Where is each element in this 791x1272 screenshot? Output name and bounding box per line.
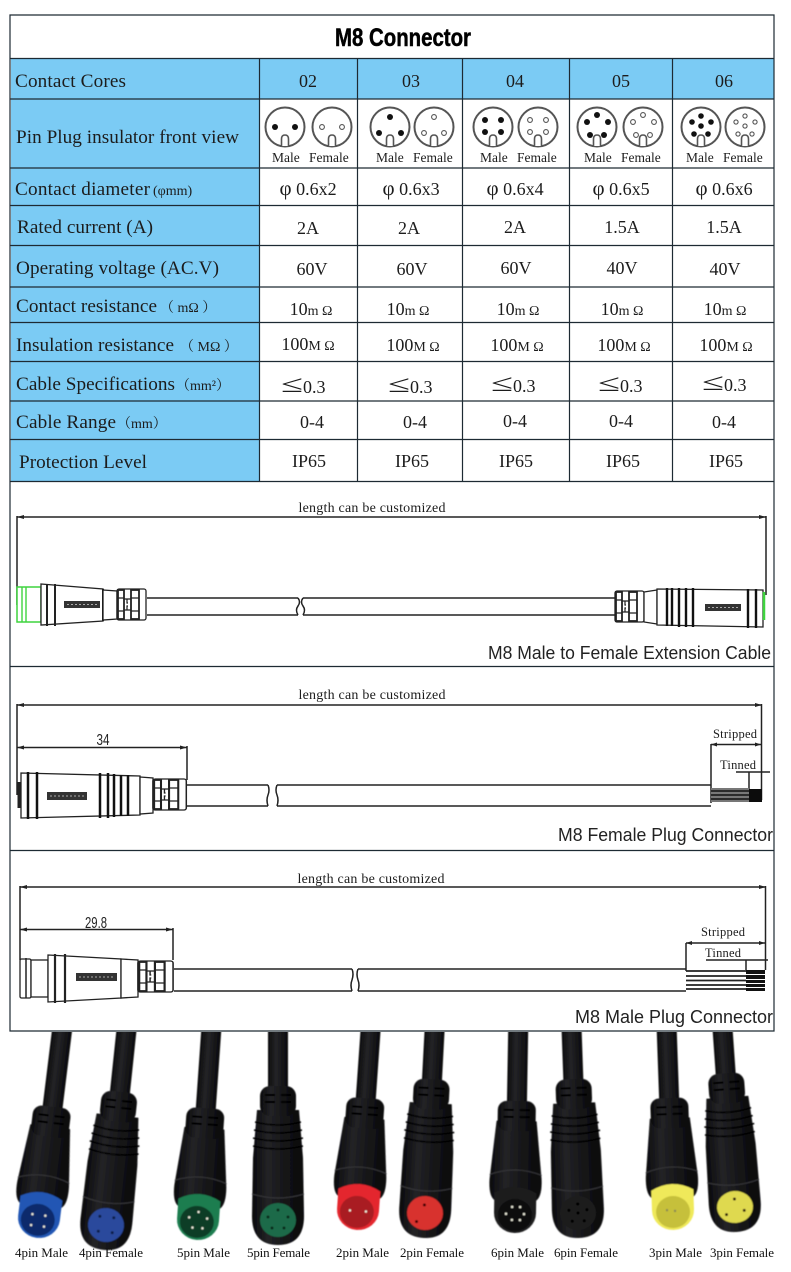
connector labels: 4pin Male <box>15 1245 68 1260</box>
row: contact diameter: φ 0.6x2 <box>279 176 337 200</box>
row: cable specifications: 0.3 <box>410 377 432 397</box>
connector: 5pin male <box>173 1032 228 1241</box>
dimension: overall length: length can be customized <box>298 501 446 516</box>
dimension: overall length <box>17 501 766 605</box>
row: protection level: IP65 <box>709 451 743 471</box>
female connector drawing <box>18 772 186 819</box>
icon: 2 pin male and female: Female <box>309 150 349 165</box>
row: contact resistance: （ mΩ ） <box>160 300 216 316</box>
row: contact resistance: 10m Ω <box>387 299 429 319</box>
row: rated current: 1.5A <box>706 217 742 237</box>
dimension: 34 <box>17 732 187 780</box>
row: rated current: 2A <box>297 218 319 238</box>
row: rated current: 1.5A <box>604 217 640 237</box>
row: insulation resistance: 100M Ω <box>281 334 335 354</box>
stripped and tinned wire end: Tinned <box>720 758 757 772</box>
row: contact cores <box>15 71 733 92</box>
row: cable range: 0-4 <box>300 412 324 432</box>
cable with break <box>187 785 711 806</box>
row: contact cores: 04 <box>506 71 524 91</box>
dimension: overall length <box>20 872 766 970</box>
row: cable specifications: 0.3 <box>513 376 536 396</box>
stripped and tinned wire end <box>686 925 768 991</box>
caption: M8 Male to Female Extension Cable <box>488 642 771 663</box>
dimension: overall length <box>17 688 762 800</box>
row: operating voltage: 60V <box>296 259 328 279</box>
stripped and tinned wire end: Stripped <box>701 925 746 939</box>
dimension: 34: 34 <box>96 732 110 749</box>
row: operating voltage <box>16 258 740 279</box>
caption: M8 Male Plug Connector <box>575 1006 773 1027</box>
row: protection level: IP65 <box>395 451 429 471</box>
panel: female plug connector <box>17 688 773 845</box>
icon: 4 pin male and female: Male <box>480 150 508 165</box>
connector labels: 6pin Male <box>491 1245 544 1260</box>
row: rated current: Rated current (A) <box>17 217 153 238</box>
header row shading <box>11 59 774 99</box>
connector labels: 2pin Male <box>336 1245 389 1260</box>
row: cable specifications: ≤ <box>702 370 724 396</box>
connector: 2pin male <box>333 1032 388 1231</box>
row: rated current: 2A <box>504 217 526 237</box>
dimension: 29.8 <box>20 915 173 960</box>
row: contact diameter: φ 0.6x6 <box>695 176 753 200</box>
row: cable specifications: Cable Specifications <box>16 374 175 395</box>
row: protection level: Protection Level <box>19 452 147 473</box>
row: contact diameter: φ 0.6x4 <box>486 176 544 200</box>
icon: 2 pin male and female <box>266 108 352 165</box>
row: insulation resistance: （ MΩ ） <box>180 339 238 355</box>
row: operating voltage: 40V <box>606 258 638 278</box>
row: contact resistance: 10m Ω <box>704 299 746 319</box>
stripped and tinned wire end <box>711 727 770 803</box>
row: contact resistance: 10m Ω <box>601 299 643 319</box>
row: cable specifications: ≤ <box>388 372 410 398</box>
male connector drawing <box>20 954 173 1003</box>
row: pin plug insulator front view: Pin Plug insulator front view <box>16 127 239 148</box>
row: insulation resistance <box>16 334 753 356</box>
icon: 2 pin male and female: Male <box>272 150 300 165</box>
dimension: 29.8: 29.8 <box>85 915 107 932</box>
row: protection level: IP65 <box>606 451 640 471</box>
row: protection level: IP65 <box>292 451 326 471</box>
row: operating voltage: 40V <box>710 259 740 279</box>
row: insulation resistance: 100M Ω <box>699 335 753 355</box>
cable with break <box>174 969 686 991</box>
row: pin plug insulator front view <box>16 108 764 165</box>
dimension: overall length: length can be customized <box>298 688 446 703</box>
label column shading <box>11 99 259 481</box>
panel: male to female extension cable <box>17 501 771 663</box>
row: contact cores: Contact Cores <box>15 71 126 92</box>
connector labels <box>15 1248 774 1260</box>
row: contact resistance: Contact resistance <box>16 296 157 317</box>
row: cable range: Cable Range <box>16 412 116 433</box>
icon: 4 pin male and female <box>474 108 558 165</box>
row: insulation resistance: 100M Ω <box>490 335 544 355</box>
row: contact diameter: φ 0.6x5 <box>592 176 650 200</box>
stripped and tinned wire end: Stripped <box>713 727 758 741</box>
row: cable specifications <box>16 370 746 398</box>
row: cable specifications: 0.3 <box>620 376 642 396</box>
female connector drawing <box>615 588 764 628</box>
row: contact cores: 06 <box>715 71 733 91</box>
connector labels: 6pin Female <box>554 1245 618 1260</box>
title: M8 Connector <box>335 24 471 52</box>
row: rated current <box>17 217 742 238</box>
connector: 4pin male <box>15 1032 73 1239</box>
row: rated current: 2A <box>398 218 420 238</box>
row: cable specifications: ≤ <box>281 372 303 398</box>
row: protection level: IP65 <box>499 451 533 471</box>
connector labels: 5pin Male <box>177 1245 230 1260</box>
icon: 5 pin male and female: Female <box>621 150 661 165</box>
connector: 3pin female <box>704 1032 762 1233</box>
connector: 3pin male <box>644 1032 699 1231</box>
row: contact cores: 05 <box>612 71 630 91</box>
row: contact cores: 03 <box>402 71 420 91</box>
row: contact cores: 02 <box>299 71 317 91</box>
connector labels: 4pin Female <box>79 1245 143 1260</box>
icon: 3 pin male and female <box>370 108 454 165</box>
connector: 6pin male <box>488 1032 542 1234</box>
row: cable specifications: 0.3 <box>724 375 746 395</box>
row: cable specifications: 0.3 <box>303 377 326 397</box>
connector: 4pin female <box>79 1032 140 1251</box>
specification table <box>10 15 774 1031</box>
row: cable range: 0-4 <box>609 411 633 431</box>
connector: 2pin female <box>398 1032 456 1239</box>
row: cable range: 0-4 <box>503 411 527 431</box>
row: contact resistance: 10m Ω <box>290 299 332 319</box>
row: contact diameter: φ 0.6x3 <box>382 176 440 200</box>
icon: 4 pin male and female: Female <box>517 150 557 165</box>
row: insulation resistance: Insulation resistance <box>16 335 174 356</box>
connector labels: 3pin Male <box>649 1245 702 1260</box>
row: cable range: 0-4 <box>403 412 427 432</box>
icon: 3 pin male and female: Male <box>376 150 404 165</box>
row: cable range <box>16 411 736 433</box>
row: contact diameter <box>15 176 753 200</box>
row: cable range: 0-4 <box>712 412 736 432</box>
icon: 6 pin male and female: Male <box>686 150 714 165</box>
row: insulation resistance: 100M Ω <box>597 335 651 355</box>
connector: 5pin female <box>251 1032 305 1246</box>
icon: 6 pin male and female <box>682 108 764 165</box>
dimension: overall length: length can be customized <box>298 872 444 887</box>
connector labels: 5pin Female <box>247 1245 310 1260</box>
panel: male plug connector <box>20 872 773 1027</box>
connector labels: 2pin Female <box>400 1245 464 1260</box>
icon: 3 pin male and female: Female <box>413 150 453 165</box>
icon: 5 pin male and female <box>578 108 662 165</box>
row: contact resistance <box>16 296 746 319</box>
row: contact diameter: (φmm) <box>153 184 193 199</box>
row: cable specifications: ≤ <box>491 371 513 397</box>
cable with break <box>147 598 615 615</box>
icon: 5 pin male and female: Male <box>584 150 612 165</box>
row: operating voltage: Operating voltage (AC.V) <box>16 258 219 279</box>
row: cable range: （mm） <box>117 416 167 432</box>
connector: 6pin female <box>549 1032 605 1239</box>
row: cable specifications: ≤ <box>598 371 620 397</box>
connector photographs <box>15 1032 774 1260</box>
stripped and tinned wire end: Tinned <box>705 946 742 960</box>
table grid <box>10 15 774 1031</box>
row: operating voltage: 60V <box>396 259 428 279</box>
connector labels: 3pin Female <box>710 1245 774 1260</box>
row: protection level <box>19 451 743 473</box>
caption: M8 Female Plug Connector <box>558 824 773 845</box>
icon: 6 pin male and female: Female <box>723 150 763 165</box>
row: cable specifications: （mm²） <box>176 378 230 394</box>
row: contact diameter: Contact diameter <box>15 179 151 200</box>
row: insulation resistance: 100M Ω <box>386 335 440 355</box>
row: operating voltage: 60V <box>500 258 532 278</box>
row: contact resistance: 10m Ω <box>497 299 539 319</box>
male connector drawing <box>17 584 146 626</box>
